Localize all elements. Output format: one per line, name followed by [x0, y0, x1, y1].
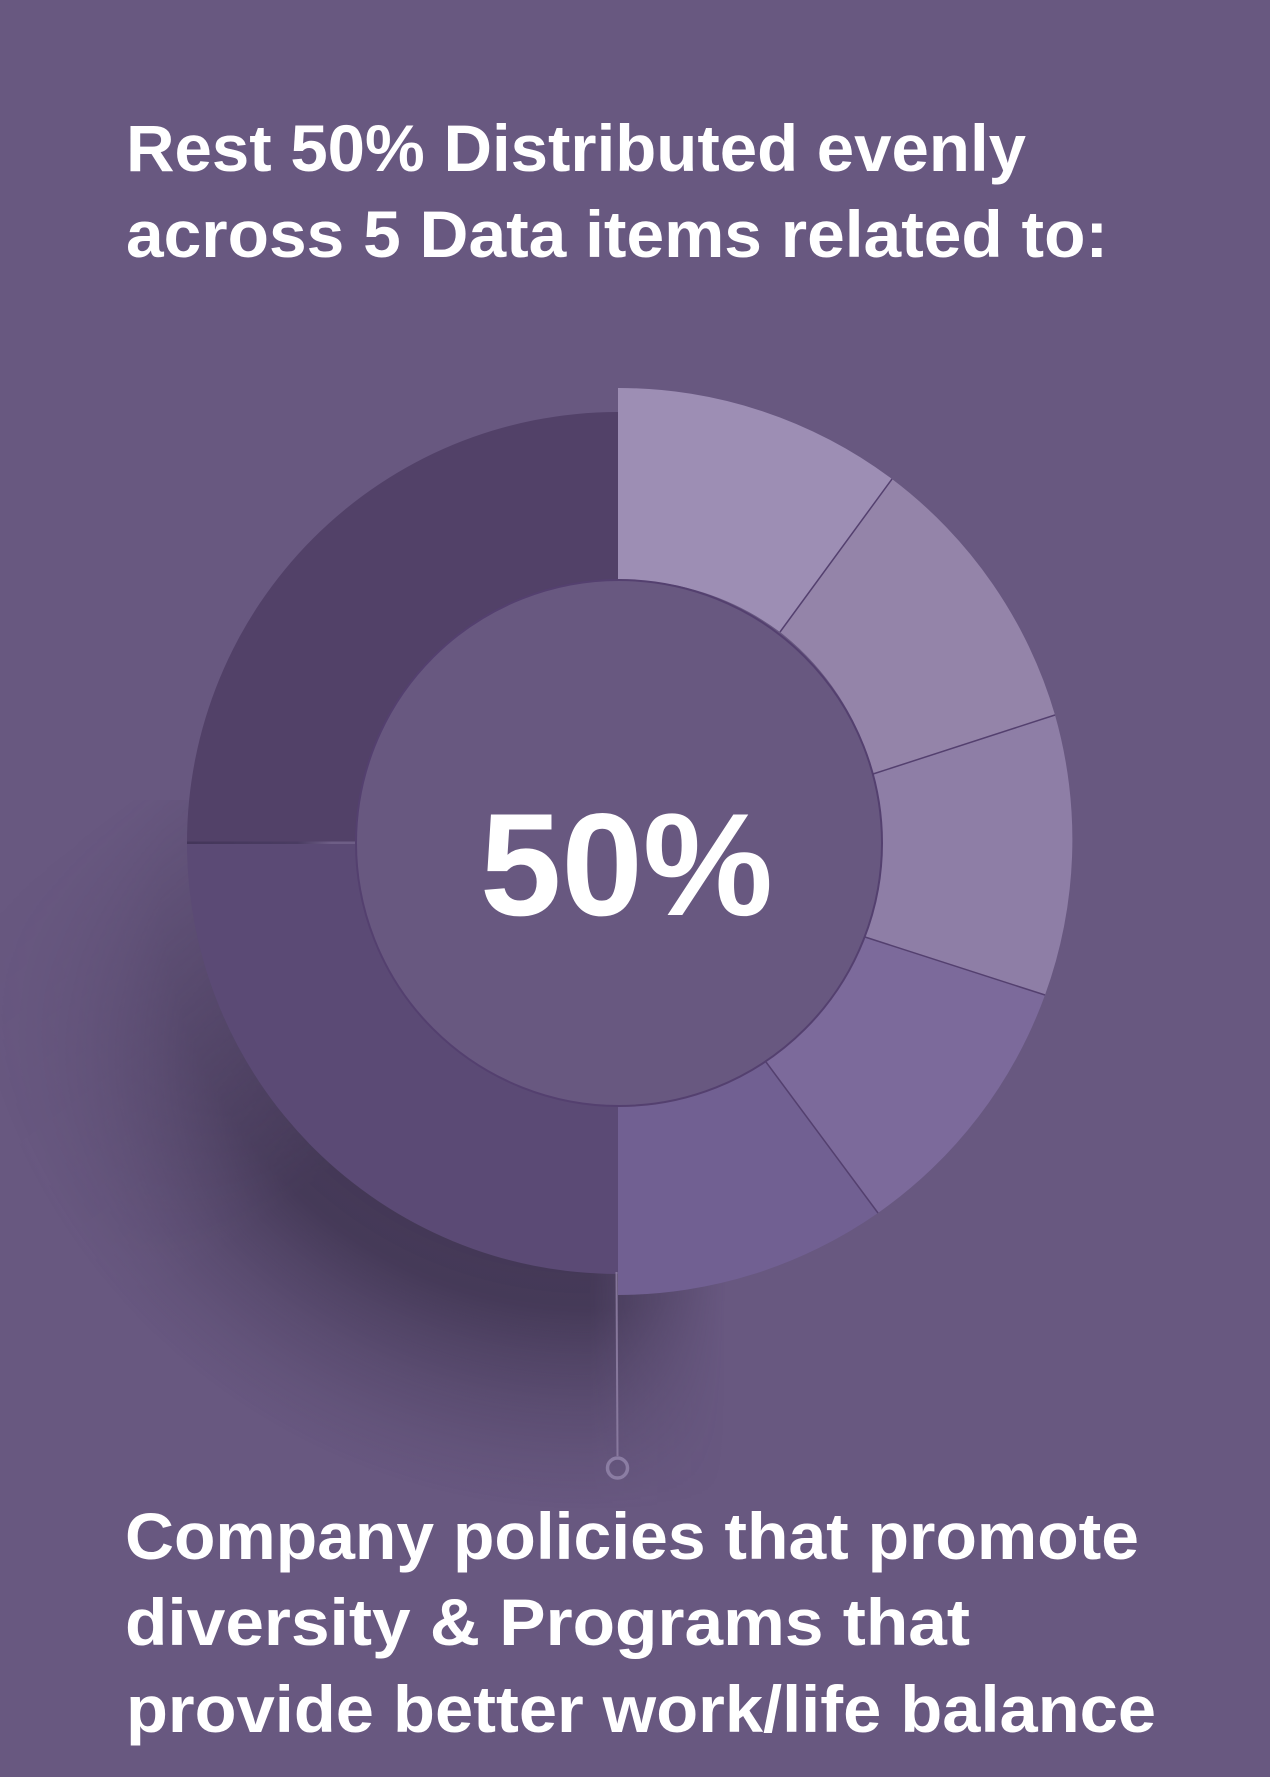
segment separators [766, 479, 1055, 1213]
infographic canvas [101, 123, 1154, 1746]
title: Rest 50% Distributed evenly [126, 111, 1026, 185]
leader line [616, 1272, 618, 1456]
bottom caption: Company policies that promote [125, 1499, 1139, 1573]
segment: left upper quarter [187, 412, 618, 843]
bottom caption [125, 1499, 1156, 1746]
bottom caption: diversity & Programs that [125, 1585, 970, 1659]
segment: left lower quarter [187, 843, 618, 1274]
segment: right 1 [618, 388, 892, 632]
centre value: 50% [480, 783, 773, 946]
leader ring marker [608, 1458, 628, 1478]
donut chart [187, 388, 1072, 1295]
drop shadow of donut [101, 859, 698, 1450]
segment: right 3 [865, 715, 1072, 995]
title [126, 111, 1108, 271]
segment: right 2 [780, 479, 1055, 774]
bottom caption: provide better work/life balance [126, 1672, 1156, 1746]
title: across 5 Data items related to: [126, 197, 1108, 271]
centre circle [356, 580, 882, 1106]
segment: right 4 [766, 937, 1045, 1213]
segment: right 5 [618, 1062, 878, 1295]
